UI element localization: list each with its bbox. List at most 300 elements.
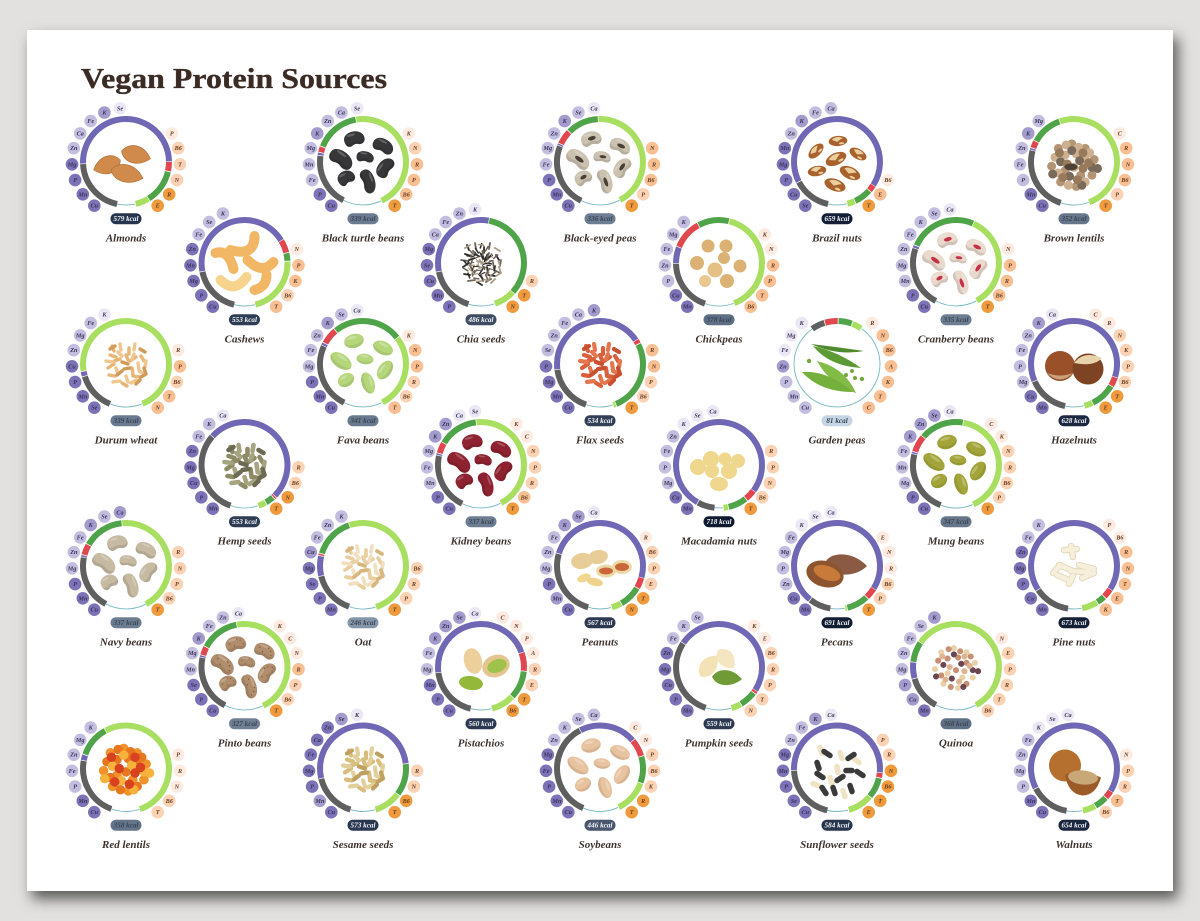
macronutrient ring — [420, 202, 542, 324]
nutrient bubbles: Zn — [787, 737, 795, 744]
nutrient bubbles: T — [522, 292, 526, 299]
nutrient bubbles: T — [156, 809, 160, 816]
nutrient bubbles: Mg — [1018, 379, 1027, 386]
nutrient bubbles: Zn — [455, 210, 464, 218]
nutrient bubbles: Mg — [900, 480, 909, 487]
nutrient bubbles: P — [768, 682, 772, 689]
nutrient bubbles: Mn — [432, 292, 443, 299]
nutrient bubbles: P — [175, 581, 179, 588]
nutrient bubbles: P — [318, 191, 322, 198]
nutrient bubbles: Ca — [456, 412, 463, 420]
nutrient bubbles: K — [562, 725, 568, 732]
nutrient bubbles: Mg — [897, 262, 906, 269]
nutrient bubbles: B6 — [883, 581, 892, 588]
name: Red lentils — [101, 839, 150, 851]
nutrient bubbles: T — [393, 203, 397, 210]
nutrient bubbles: Cu — [565, 809, 573, 816]
nutrient bubbles: P — [547, 784, 551, 791]
kcal pill — [822, 213, 852, 224]
nutrient bubbles — [303, 304, 423, 414]
kcal pill — [1058, 213, 1090, 224]
chart: Sesame seeds — [303, 708, 423, 851]
nutrient bubbles — [303, 510, 423, 616]
nutrient bubbles: Fe — [907, 635, 914, 642]
nutrient bubbles: K — [1103, 607, 1109, 614]
nutrient bubbles: Zn — [550, 737, 558, 744]
nutrient bubbles: R — [1004, 682, 1009, 689]
nutrient bubbles: Fe — [87, 320, 94, 327]
nutrient bubbles: Ca — [590, 509, 598, 516]
nutrient bubbles: Mg — [75, 332, 85, 339]
nutrient bubbles: Se — [694, 412, 701, 420]
nutrient bubbles: P — [199, 494, 203, 501]
nutrient bubbles: Cu — [802, 809, 810, 816]
name: Almonds — [105, 233, 146, 245]
nutrient bubbles — [421, 607, 541, 717]
kcal pill: 654 kcal — [1062, 822, 1086, 830]
nutrient bubbles: Mn — [800, 607, 810, 614]
nutrient bubbles: T — [393, 809, 397, 816]
macronutrient ring — [776, 101, 898, 223]
nutrient bubbles: R — [770, 666, 775, 673]
nutrient bubbles: T — [630, 203, 634, 210]
nutrient bubbles: Mn — [304, 161, 314, 168]
nutrient bubbles: Mg — [544, 379, 553, 386]
icon: mung beans — [920, 433, 989, 496]
name: Sunflower seeds — [800, 839, 874, 851]
nutrient bubbles: C — [525, 433, 530, 440]
nutrient bubbles: E — [1005, 650, 1010, 657]
nutrient bubbles — [303, 708, 423, 818]
macronutrient ring — [70, 308, 182, 420]
nutrient bubbles: N — [747, 708, 753, 715]
nutrient bubbles: K — [562, 522, 568, 529]
nutrient bubbles: P — [73, 177, 77, 184]
kcal pill — [584, 617, 616, 628]
nutrient bubbles: T — [878, 393, 882, 400]
nutrient bubbles: K — [220, 210, 226, 218]
nutrient bubbles: Mn — [897, 464, 907, 471]
nutrient bubbles: N — [412, 347, 418, 354]
nutrient bubbles: Mn — [425, 682, 435, 689]
nutrient bubbles: Fe — [1025, 737, 1032, 744]
nutrient bubbles — [421, 405, 541, 515]
nutrient bubbles: Fe — [543, 161, 550, 168]
icon: pistachios — [458, 646, 513, 692]
macronutrient ring — [659, 607, 779, 727]
chart: Kidney beans — [421, 405, 541, 548]
nutrient bubbles: P — [544, 363, 548, 370]
nutrient bubbles: Mn — [314, 393, 325, 400]
nutrient bubbles: K — [1036, 725, 1042, 732]
nutrient bubbles: Fe — [442, 219, 449, 226]
nutrient bubbles: B6 — [885, 347, 894, 354]
nutrient bubbles: Cu — [1027, 595, 1035, 602]
name: Mung beans — [927, 536, 984, 548]
nutrient bubbles: K — [931, 614, 937, 622]
nutrient bubbles: R — [529, 278, 534, 285]
name: Fava beans — [336, 435, 389, 447]
kcal pill — [229, 718, 260, 729]
title: Vegan Protein Sources — [81, 63, 387, 95]
nutrient bubbles: B6 — [746, 304, 755, 311]
nutrient bubbles: Ca — [116, 509, 124, 516]
name: Garden peas — [808, 435, 866, 447]
icon: pecans — [803, 554, 867, 591]
nutrient bubbles: B6 — [1101, 809, 1110, 816]
nutrient bubbles: C — [867, 405, 872, 412]
kcal pill — [466, 718, 496, 729]
nutrient bubbles: Mg — [786, 332, 796, 339]
nutrient bubbles: K — [101, 312, 107, 318]
nutrient bubbles: N — [1123, 752, 1129, 759]
nutrient bubbles: N — [174, 177, 180, 184]
macronutrient ring — [661, 205, 777, 321]
nutrient bubbles: Se — [1049, 716, 1056, 723]
nutrient bubbles — [66, 506, 186, 616]
kcal pill — [584, 213, 616, 224]
nutrient bubbles: Cu — [565, 405, 573, 412]
nutrient bubbles: Se — [354, 105, 360, 112]
nutrient bubbles: Cu — [565, 607, 573, 614]
nutrient bubbles — [659, 405, 779, 515]
nutrient bubbles: N — [886, 549, 892, 556]
nutrient bubbles: P — [199, 292, 203, 299]
nutrient bubbles: N — [649, 145, 655, 152]
macronutrient ring — [776, 708, 898, 829]
nutrient bubbles: Se — [117, 105, 123, 112]
name: Durum wheat — [94, 435, 158, 447]
nutrient bubbles — [1014, 308, 1134, 414]
nutrient bubbles — [1014, 115, 1134, 212]
nutrient bubbles: K — [751, 623, 757, 630]
kcal pill: 628 kcal — [1062, 417, 1086, 425]
nutrient bubbles: P — [1115, 191, 1119, 198]
nutrient bubbles: P — [297, 262, 301, 269]
nutrient bubbles — [777, 708, 897, 818]
nutrient bubbles: P — [911, 494, 915, 501]
nutrient bubbles: P — [1021, 581, 1025, 588]
nutrient bubbles: Mg — [304, 565, 313, 572]
nutrient bubbles: Se — [931, 210, 938, 218]
name: Pumpkin seeds — [685, 738, 753, 750]
nutrient bubbles — [777, 102, 894, 212]
nutrient bubbles: Mg — [778, 161, 787, 168]
nutrient bubbles: Zn — [69, 549, 78, 556]
kcal pill — [1058, 415, 1090, 426]
nutrient bubbles: P — [878, 595, 882, 602]
nutrient bubbles: B6 — [639, 393, 648, 400]
chart: Walnuts — [1013, 708, 1135, 851]
name: Macadamia nuts — [680, 536, 757, 548]
nutrient bubbles: Mg — [542, 752, 552, 759]
nutrient bubbles: K — [799, 522, 805, 529]
nutrient bubbles: P — [784, 379, 788, 386]
nutrient bubbles: Zn — [1017, 752, 1026, 759]
macronutrient ring — [1015, 305, 1133, 423]
nutrient bubbles: Cu — [1039, 809, 1047, 816]
icon: macadamia nuts — [690, 451, 745, 491]
nutrient bubbles — [540, 708, 660, 818]
nutrient bubbles — [896, 203, 1016, 313]
nutrient bubbles: K — [885, 379, 891, 386]
nutrient bubbles: T — [867, 203, 871, 210]
nutrient bubbles: Se — [309, 581, 315, 588]
nutrient bubbles: Zn — [188, 448, 196, 455]
nutrient bubbles: Se — [575, 110, 582, 116]
nutrient bubbles: Zn — [323, 725, 332, 732]
nutrient bubbles: Zn — [778, 363, 787, 370]
nutrient bubbles: N — [293, 246, 299, 253]
kcal pill: 691 kcal — [825, 619, 849, 627]
chart: Brazil nuts — [776, 101, 898, 245]
icon: walnuts — [1049, 750, 1101, 796]
nutrient bubbles: Se — [802, 203, 809, 210]
nutrient bubbles: Mg — [1015, 768, 1024, 775]
nutrient bubbles: Mn — [1037, 607, 1047, 614]
nutrient bubbles: E — [1103, 405, 1108, 412]
nutrient bubbles: Cu — [790, 595, 798, 602]
nutrient bubbles: Mg — [542, 145, 552, 152]
nutrient bubbles: Zn — [218, 614, 227, 622]
name: Kidney beans — [450, 536, 511, 548]
macronutrient ring — [308, 511, 418, 621]
macronutrient ring — [895, 404, 1017, 526]
chart: Pinto beans — [184, 607, 305, 750]
nutrient bubbles: R — [1123, 549, 1128, 556]
nutrient bubbles: R — [166, 191, 171, 198]
kcal pill — [229, 516, 260, 527]
nutrient bubbles: R — [411, 581, 416, 588]
nutrient bubbles: Ca — [235, 610, 242, 617]
chart: Hazelnuts — [1014, 305, 1134, 447]
kcal pill: 339 kcal — [113, 417, 138, 425]
nutrient bubbles: T — [630, 809, 634, 816]
name: Soybeans — [579, 839, 621, 851]
kcal pill: 659 kcal — [825, 215, 849, 223]
nutrient bubbles: T — [867, 607, 871, 614]
name: Brown lentils — [1043, 233, 1104, 245]
nutrient bubbles — [896, 405, 1016, 515]
nutrient bubbles: Se — [456, 614, 463, 622]
chart: Cranberry beans — [896, 203, 1016, 346]
kcal pill — [348, 415, 378, 426]
nutrient bubbles: K — [406, 130, 412, 137]
nutrient bubbles: Se — [575, 716, 582, 723]
kcal pill: 358 kcal — [113, 822, 138, 830]
nutrient bubbles: T — [1115, 798, 1119, 805]
nutrient bubbles: T — [167, 393, 171, 400]
nutrient bubbles: T — [760, 292, 764, 299]
kcal pill: 718 kcal — [707, 518, 731, 526]
nutrient bubbles: N — [768, 246, 774, 253]
kcal pill: 559 kcal — [707, 720, 731, 728]
chart: Quinoa — [896, 607, 1016, 750]
nutrient bubbles: K — [292, 278, 298, 285]
nutrient bubbles: Se — [931, 412, 938, 420]
nutrient bubbles: Se — [918, 623, 924, 630]
nutrient bubbles: P — [310, 379, 314, 386]
nutrient bubbles: R — [768, 448, 773, 455]
nutrient bubbles: Mg — [67, 565, 76, 572]
nutrient bubbles: B6 — [1002, 480, 1011, 487]
kcal pill — [584, 415, 616, 426]
nutrient bubbles: Cu — [565, 203, 573, 210]
nutrient bubbles: C — [501, 614, 506, 622]
nutrient bubbles: Se — [101, 514, 108, 520]
name: Cranberry beans — [918, 334, 994, 346]
name: Pistachios — [458, 738, 504, 750]
nutrient bubbles: T — [156, 607, 160, 614]
icon: pinto beans — [208, 634, 278, 700]
macronutrient ring — [303, 708, 423, 829]
nutrient bubbles: Fe — [77, 534, 84, 541]
nutrient bubbles — [1014, 519, 1134, 616]
macronutrient ring — [186, 609, 303, 725]
nutrient bubbles: Fe — [69, 768, 76, 775]
chart: Pistachios — [420, 606, 542, 750]
chart: Red lentils — [66, 710, 186, 851]
macronutrient ring — [184, 404, 305, 526]
nutrient bubbles: K — [681, 219, 687, 226]
nutrient bubbles: Fe — [781, 347, 788, 354]
nutrient bubbles: B6 — [402, 798, 411, 805]
nutrient bubbles: T — [749, 506, 753, 513]
nutrient bubbles: Mn — [900, 278, 910, 285]
nutrient bubbles: Cu — [802, 405, 810, 412]
nutrient bubbles: Fe — [900, 448, 907, 455]
nutrient bubbles: P — [1126, 768, 1130, 775]
nutrient bubbles: Fe — [424, 464, 431, 471]
nutrient bubbles: Fe — [670, 635, 677, 642]
kcal pill: 368 kcal — [943, 720, 968, 728]
nutrient bubbles: R — [1123, 145, 1128, 152]
nutrient bubbles: P — [1018, 363, 1022, 370]
macronutrient ring — [68, 710, 184, 827]
kcal pill — [1058, 820, 1090, 831]
nutrient bubbles: Mg — [1033, 118, 1043, 125]
nutrient bubbles: Cu — [328, 405, 336, 412]
kcal pill: 347 kcal — [943, 518, 968, 526]
nutrient bubbles: B6 — [1115, 534, 1124, 541]
nutrient bubbles: Fe — [87, 118, 94, 125]
chart: Chickpeas — [659, 205, 779, 346]
chart: Soybeans — [539, 708, 661, 851]
icon: fava beans — [327, 332, 396, 395]
nutrient bubbles: K — [196, 635, 202, 642]
icon: flax seeds — [580, 344, 620, 386]
nutrient bubbles: Cu — [909, 696, 917, 703]
nutrient bubbles — [659, 611, 779, 717]
nutrient bubbles: P — [404, 595, 408, 602]
nutrient bubbles: Cu — [91, 809, 99, 816]
nutrient bubbles — [66, 102, 186, 212]
nutrient bubbles: N — [1125, 161, 1131, 168]
nutrient bubbles — [421, 203, 538, 313]
nutrient bubbles: Fe — [551, 534, 558, 541]
nutrient bubbles: Mg — [779, 752, 789, 759]
macronutrient ring — [539, 101, 661, 223]
nutrient bubbles: Ca — [353, 307, 361, 314]
nutrient bubbles — [540, 102, 660, 212]
nutrient bubbles: P — [547, 581, 551, 588]
nutrient bubbles: Zn — [662, 650, 671, 657]
nutrient bubbles: T — [641, 595, 645, 602]
name: Pinto beans — [218, 738, 271, 750]
nutrient bubbles: T — [178, 161, 182, 168]
nutrient bubbles: Cu — [1039, 203, 1047, 210]
nutrient bubbles — [184, 409, 305, 515]
name: Peanuts — [582, 637, 618, 649]
nutrient bubbles: T — [630, 405, 634, 412]
nutrient bubbles: Mn — [77, 393, 88, 400]
macronutrient ring — [541, 305, 659, 423]
nutrient bubbles: R — [1004, 278, 1009, 285]
kcal pill — [704, 718, 734, 729]
nutrient bubbles: Cu — [672, 494, 680, 501]
nutrient bubbles: Mg — [422, 666, 431, 673]
kcal pill — [584, 820, 616, 831]
nutrient bubbles: K — [762, 231, 768, 238]
nutrient bubbles: P — [649, 379, 653, 386]
nutrient bubbles: N — [999, 635, 1005, 642]
nutrient bubbles: K — [101, 110, 107, 116]
nutrient bubbles: K — [354, 712, 360, 719]
nutrient bubbles: Fe — [561, 320, 568, 327]
nutrient bubbles: Se — [206, 219, 213, 226]
nutrient bubbles: B6 — [402, 393, 411, 400]
nutrient bubbles: P — [294, 682, 298, 689]
chart: Hemp seeds — [184, 404, 305, 548]
nutrient bubbles: Mn — [551, 595, 562, 602]
nutrient bubbles: Cu — [664, 682, 672, 689]
nutrient bubbles: C — [1094, 312, 1099, 318]
nutrient bubbles: T — [878, 798, 882, 805]
nutrient bubbles: A — [888, 363, 893, 370]
icon: sunflower seeds — [813, 748, 863, 796]
macronutrient ring — [541, 507, 659, 625]
nutrient bubbles: Zn — [1024, 332, 1032, 339]
chart: Pecans — [776, 505, 898, 649]
nutrient bubbles: Mg — [423, 448, 433, 455]
kcal pill: 579 kcal — [114, 215, 138, 223]
nutrient bubbles: Mn — [551, 798, 562, 805]
nutrient bubbles: E — [762, 635, 767, 642]
nutrient bubbles: P — [547, 177, 551, 184]
nutrient bubbles: R — [414, 161, 419, 168]
nutrient bubbles: Cu — [68, 363, 76, 370]
nutrient bubbles — [66, 721, 186, 818]
kcal pill: 486 kcal — [468, 316, 493, 324]
nutrient bubbles: B6 — [402, 191, 411, 198]
nutrient bubbles: Zn — [543, 549, 552, 556]
name: Cashews — [225, 334, 264, 346]
nutrient bubbles — [184, 207, 305, 313]
nutrient bubbles: Fe — [663, 448, 670, 455]
nutrient bubbles: K — [648, 784, 654, 791]
nutrient bubbles: Cu — [426, 278, 434, 285]
nutrient bubbles: Se — [191, 682, 197, 689]
nutrient bubbles: T — [986, 304, 990, 311]
nutrient bubbles: B6 — [883, 784, 892, 791]
nutrient bubbles: N — [651, 363, 657, 370]
nutrient bubbles: P — [911, 292, 915, 299]
nutrient bubbles: Mg — [305, 145, 315, 152]
nutrient bubbles: P — [881, 737, 885, 744]
icon: oat — [343, 546, 383, 588]
nutrient bubbles: Fe — [543, 768, 550, 775]
chart: Oat — [303, 510, 423, 649]
